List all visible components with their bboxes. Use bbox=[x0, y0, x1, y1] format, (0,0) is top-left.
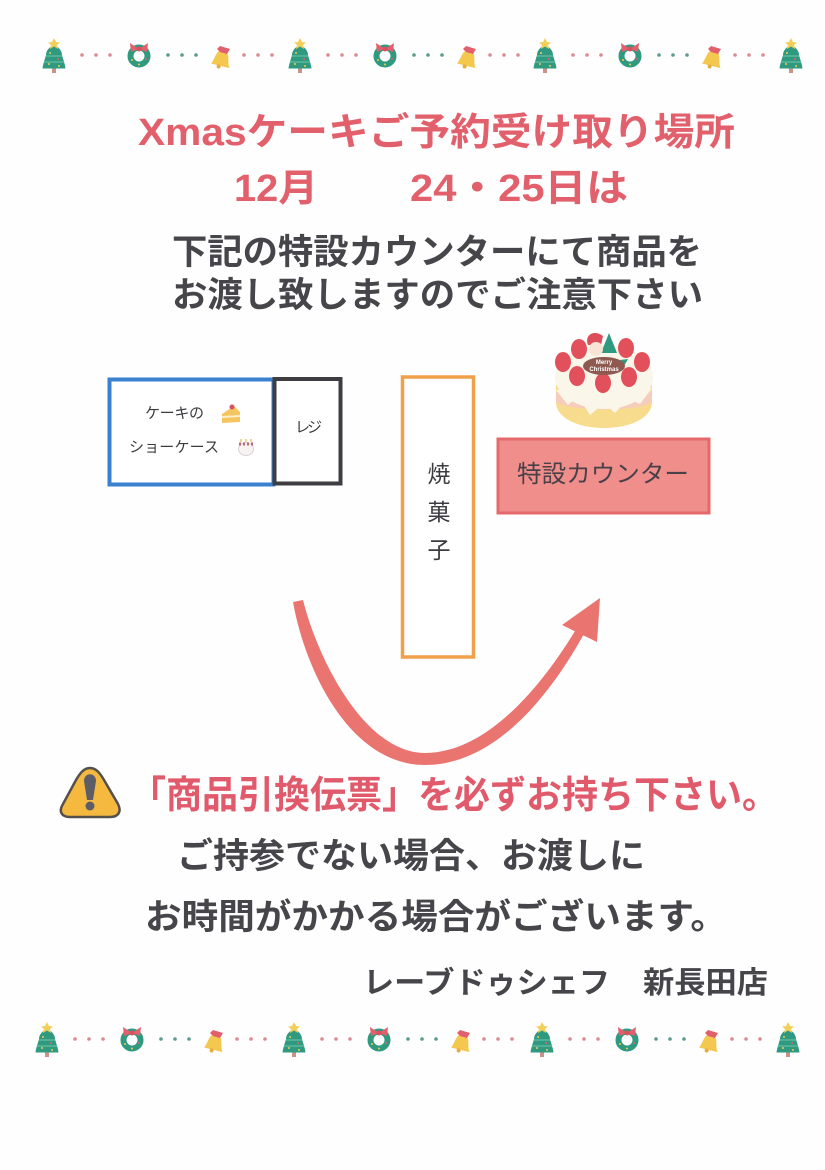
arrow: route to counter bbox=[293, 598, 600, 765]
panel: baked goods: 子 bbox=[428, 537, 450, 563]
title: 24・25日は bbox=[410, 168, 628, 210]
store name: 新長田店 bbox=[643, 967, 768, 1000]
title: Xmasケーキご予約受け取り場所 bbox=[138, 112, 735, 154]
icon: cake slice bbox=[222, 404, 240, 423]
icon: Christmas cake bbox=[555, 333, 653, 428]
top Christmas garland bbox=[42, 38, 802, 73]
warning body: お時間がかかる場合がございます。 bbox=[145, 897, 727, 937]
icon: birthday cake bbox=[238, 439, 254, 456]
notice text bbox=[172, 233, 703, 315]
panel: special counter bbox=[498, 439, 709, 513]
panel: baked goods: 焼 bbox=[428, 461, 450, 487]
bottom Christmas garland bbox=[36, 1022, 800, 1057]
panel: cake showcase: ケーキの bbox=[145, 405, 204, 422]
title: 12月 bbox=[234, 168, 318, 210]
icon: warning triangle bbox=[61, 768, 120, 817]
title bbox=[138, 112, 735, 210]
warning body bbox=[145, 837, 727, 937]
panel: baked goods: 菓 bbox=[428, 499, 450, 525]
icon: Christmas cake: Merry bbox=[596, 360, 613, 366]
icon: Christmas cake: Christmas bbox=[589, 367, 619, 373]
panel: special counter: 特設カウンター bbox=[517, 461, 689, 488]
panel: cake showcase: ショーケース bbox=[129, 439, 219, 456]
store name: レーブドゥシェフ bbox=[363, 966, 610, 1000]
panel: cake showcase bbox=[110, 380, 274, 484]
panel: register bbox=[274, 379, 340, 484]
store name bbox=[363, 966, 768, 1000]
warning heading: 「商品引換伝票」を必ずお持ち下さい。 bbox=[130, 775, 778, 817]
warning body: ご持参でない場合、お渡しに bbox=[177, 837, 645, 876]
panel: register: レジ bbox=[295, 419, 322, 436]
panel: baked goods bbox=[402, 377, 474, 657]
notice text: お渡し致しますのでご注意下さい bbox=[172, 276, 703, 315]
notice text: 下記の特設カウンターにて商品を bbox=[172, 233, 702, 272]
